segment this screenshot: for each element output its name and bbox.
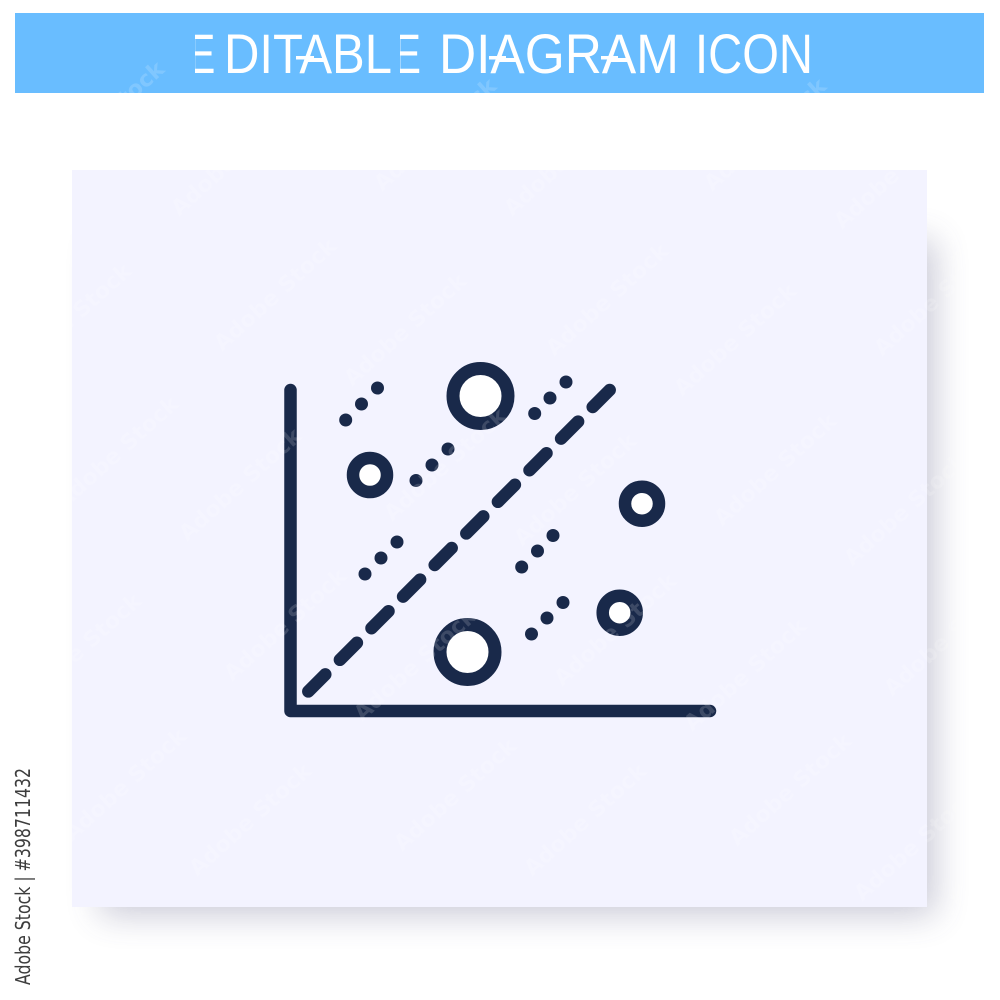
banner title: DITABL xyxy=(224,22,392,85)
chart axes xyxy=(290,390,710,711)
stock watermarks: Adobe Stock xyxy=(840,448,973,571)
stock watermarks: Adobe Stock xyxy=(340,268,473,391)
stock watermarks: Adobe Stock xyxy=(175,423,308,546)
stock watermarks: Adobe Stock xyxy=(210,233,343,356)
large data points xyxy=(440,368,508,680)
stock watermarks: Adobe Stock xyxy=(850,783,983,906)
panel xyxy=(72,170,927,907)
stock watermarks: Adobe Stock xyxy=(725,728,858,851)
stock watermarks: Adobe Stock xyxy=(510,428,643,551)
stock watermarks: Adobe Stock xyxy=(370,73,503,196)
dashed trend line xyxy=(308,390,610,691)
stock watermarks: Adobe Stock xyxy=(38,56,171,179)
stock id label: Adobe Stock | #398711432 xyxy=(11,768,35,985)
banner title: E xyxy=(393,22,421,85)
banner title: DIAGRAM xyxy=(439,22,679,85)
stock watermarks: Adobe Stock xyxy=(52,391,185,514)
scatter chart icon xyxy=(290,368,710,711)
small data points xyxy=(353,458,659,630)
stock watermarks: Adobe Stock xyxy=(500,98,633,221)
header banner xyxy=(15,13,984,93)
banner title: E xyxy=(188,22,215,85)
stock watermarks: Adobe Stock xyxy=(870,238,1000,361)
stock watermarks: Adobe Stock xyxy=(5,258,138,381)
stock watermarks: Adobe Stock xyxy=(700,73,833,196)
stock watermarks: Adobe Stock xyxy=(520,758,653,881)
stock watermarks: Adobe Stock xyxy=(380,403,513,526)
stock watermarks: Adobe Stock xyxy=(390,733,523,856)
stock watermarks: Adobe Stock xyxy=(167,98,300,221)
stock watermarks: Adobe Stock xyxy=(550,568,683,691)
panel shadow xyxy=(100,240,935,915)
stock watermarks: Adobe Stock xyxy=(220,563,353,686)
banner title: ICON xyxy=(695,22,813,85)
stock watermarks: Adobe Stock xyxy=(710,408,843,531)
banner title xyxy=(186,22,813,85)
dotted clusters xyxy=(339,376,572,640)
stock watermarks: Adobe Stock xyxy=(542,238,675,361)
stock watermarks: Adobe Stock xyxy=(60,723,193,846)
stock watermarks: Adobe Stock xyxy=(15,588,148,711)
stock watermarks: Adobe Stock xyxy=(185,758,318,881)
stock watermarks: Adobe Stock xyxy=(680,613,813,736)
stock watermarks: Adobe Stock xyxy=(670,278,803,401)
stock watermarks: Adobe Stock xyxy=(830,111,963,234)
stock watermarks: Adobe Stock xyxy=(350,603,483,726)
